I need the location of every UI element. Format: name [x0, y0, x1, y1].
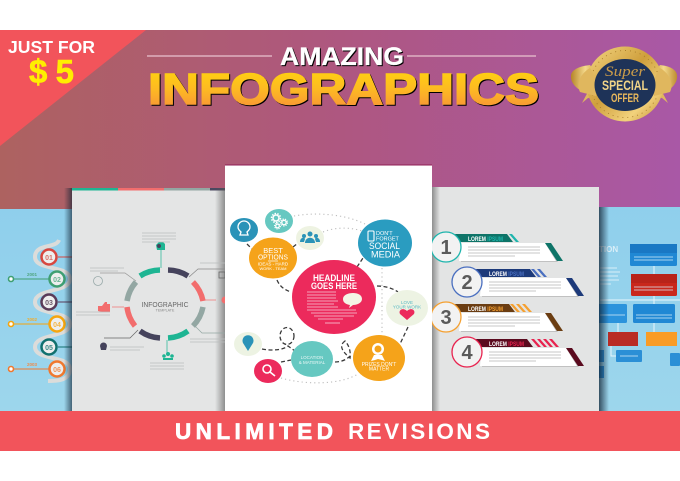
bubble: love your work	[386, 290, 428, 326]
dashed connectors	[247, 243, 408, 362]
flowchart boxes	[597, 244, 680, 378]
timeline nodes: 05	[45, 345, 53, 352]
timeline nodes: 02	[53, 277, 61, 284]
prizes text: MATTER	[369, 366, 389, 372]
title line: infographics: INFOGRAPHICS	[148, 65, 539, 114]
text: just for: JUST FOR	[8, 37, 95, 57]
icon: tablet	[368, 231, 374, 241]
headline: HEADLINE	[313, 273, 355, 283]
banner text: REVISIONS	[348, 419, 490, 444]
prizes text: PRIZES DON'T	[362, 362, 396, 368]
icon: people	[300, 232, 320, 243]
small caption lines	[76, 233, 225, 369]
best options text: OPTIONS	[258, 252, 288, 262]
headline	[311, 273, 357, 291]
title line: amazing: AMAZING	[280, 43, 404, 71]
panel: right blue flowchart	[597, 207, 680, 413]
icons	[94, 242, 228, 360]
title	[147, 43, 539, 114]
timeline nodes	[42, 250, 64, 376]
best options text: WORK - TEAM	[259, 266, 287, 271]
banner text	[175, 419, 490, 444]
social media text: FORGET	[376, 236, 400, 242]
bubble: social media	[358, 220, 412, 266]
bubble: best options	[249, 238, 297, 278]
bubble: people	[296, 226, 324, 250]
bubble: search	[254, 359, 282, 383]
bubble: headline	[292, 260, 376, 334]
icon: bulb	[238, 221, 250, 235]
icon: magnifier	[263, 365, 275, 376]
panel: gray infographic template	[64, 188, 228, 413]
ring chart	[127, 270, 203, 338]
icon: gears	[272, 214, 287, 229]
timeline nodes: 03	[45, 300, 53, 307]
icon: heart	[400, 309, 414, 320]
social media text: DON'T	[376, 231, 393, 237]
colour strip	[72, 188, 225, 190]
timeline year labels: 2002	[27, 317, 38, 322]
badge text: special: SPECIAL	[602, 77, 648, 93]
best options text: BEST	[263, 246, 283, 255]
love text	[393, 300, 421, 310]
timeline year labels	[27, 272, 38, 367]
bubble: prizes	[353, 335, 405, 381]
social media text: MEDIA	[371, 250, 400, 260]
bubble: pin	[234, 332, 262, 356]
number 3: 3	[440, 307, 452, 329]
item 2	[452, 267, 584, 297]
location text: LOCATION	[301, 355, 323, 360]
leader lines	[100, 250, 225, 353]
social media text	[369, 231, 400, 260]
flowchart text lines	[600, 268, 620, 284]
item 3 heading: LOREM IPSUM	[468, 307, 503, 313]
item 3	[431, 302, 563, 332]
banner text: UNLIMITED	[175, 419, 333, 444]
panel: centre white infographic	[225, 164, 432, 414]
dotted connectors	[281, 214, 382, 383]
item 1	[431, 232, 563, 262]
bubble: location	[291, 341, 333, 377]
bubble: gears	[265, 209, 293, 233]
timeline nodes: 04	[53, 322, 61, 329]
icon: rosette	[371, 343, 385, 361]
badge text: super: Super	[605, 64, 645, 80]
love text: YOUR WORK	[393, 304, 421, 310]
flowchart box text	[600, 257, 673, 356]
bubble: bulb	[230, 218, 258, 242]
panel: gray numbered list	[431, 187, 599, 413]
timeline year labels: 2003	[27, 362, 38, 367]
ring centre title: INFOGRAPHIC	[142, 302, 188, 309]
number 2: 2	[461, 272, 473, 294]
location text	[299, 355, 326, 365]
text: price: $5	[29, 53, 74, 90]
badge: special offer	[571, 46, 677, 122]
ring centre subtitle: TEMPLATE	[156, 308, 175, 312]
number 1: 1	[440, 237, 452, 259]
flowchart connectors	[600, 266, 680, 356]
timeline road	[35, 240, 70, 381]
prizes text	[362, 362, 396, 372]
item 4 heading: LOREM IPSUM	[489, 342, 524, 348]
item 2 heading: LOREM IPSUM	[489, 272, 524, 278]
best options text: IDEAS - HARD	[258, 262, 289, 266]
body copy	[307, 292, 357, 323]
panel: left blue timeline	[0, 209, 72, 413]
timeline nodes: 06	[53, 367, 61, 374]
timeline nodes: 01	[45, 255, 53, 262]
timeline year labels: 2001	[27, 272, 38, 277]
location text: & MATERIAL	[299, 360, 326, 365]
icon: speech bubble	[343, 293, 362, 308]
bottom banner	[0, 411, 680, 451]
best options text	[258, 246, 289, 271]
love text: LOVE	[401, 300, 413, 305]
item 4	[452, 337, 584, 367]
badge text: offer: OFFER	[611, 93, 639, 105]
price corner	[0, 30, 146, 146]
item 1 heading: LOREM IPSUM	[468, 237, 503, 243]
flowchart heading: TION	[599, 245, 618, 254]
social media text: SOCIAL	[369, 241, 400, 251]
number 4: 4	[461, 342, 473, 364]
icon: pin	[242, 335, 254, 351]
headline: GOES HERE	[311, 281, 357, 291]
